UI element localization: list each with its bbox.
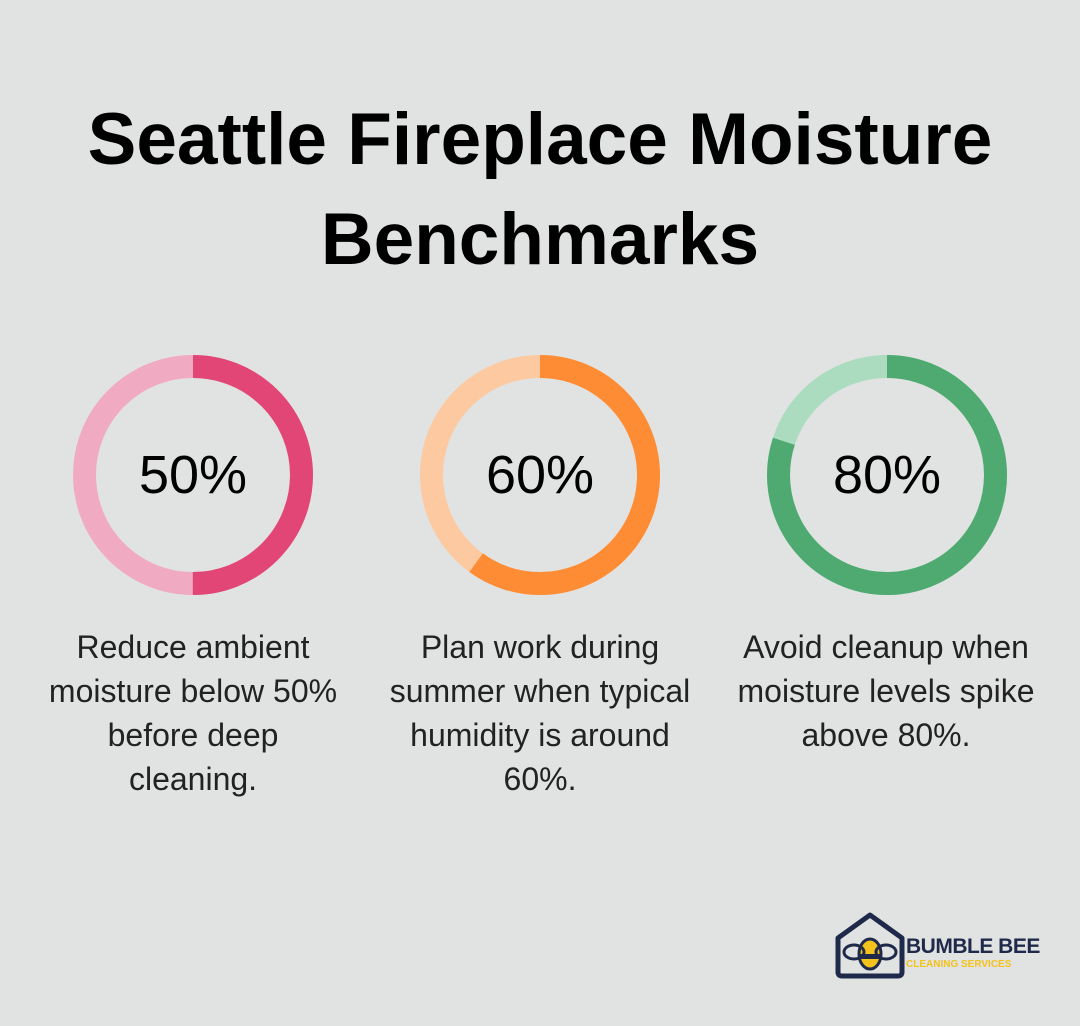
logo text: BUMBLE BEE (906, 935, 1040, 958)
title (88, 99, 992, 280)
desc: 60%: humidity is around (410, 717, 670, 753)
icon: bee house (836, 912, 904, 978)
ring: 50% (73, 355, 313, 595)
desc: 80% (738, 629, 1034, 753)
desc: 50%: Reduce ambient (76, 629, 310, 665)
desc: 60%: summer when typical (390, 673, 690, 709)
ring: 50%: 50% (139, 445, 247, 505)
desc: 60% (390, 629, 690, 797)
desc: 80%: Avoid cleanup when (743, 629, 1029, 665)
logo: CLEANING SERVICES (906, 959, 1011, 970)
ring: 60%: 60% (486, 445, 594, 505)
desc: 60%: Plan work during (421, 629, 659, 665)
desc: 80%: moisture levels spike (738, 673, 1034, 709)
desc: 50% (49, 629, 337, 797)
ring: 60% (420, 355, 660, 595)
desc: 50%: moisture below 50% (49, 673, 337, 709)
title: Seattle Fireplace Moisture (88, 99, 992, 180)
ring: 80% (767, 355, 1007, 595)
desc: 80%: above 80%. (801, 717, 970, 753)
logo (836, 912, 1040, 978)
ring: 80%: 80% (833, 445, 941, 505)
desc: 50%: before deep (108, 717, 278, 753)
title: Benchmarks (321, 199, 759, 280)
desc: 50%: cleaning. (129, 761, 257, 797)
desc: 60%: 60%. (504, 761, 576, 797)
